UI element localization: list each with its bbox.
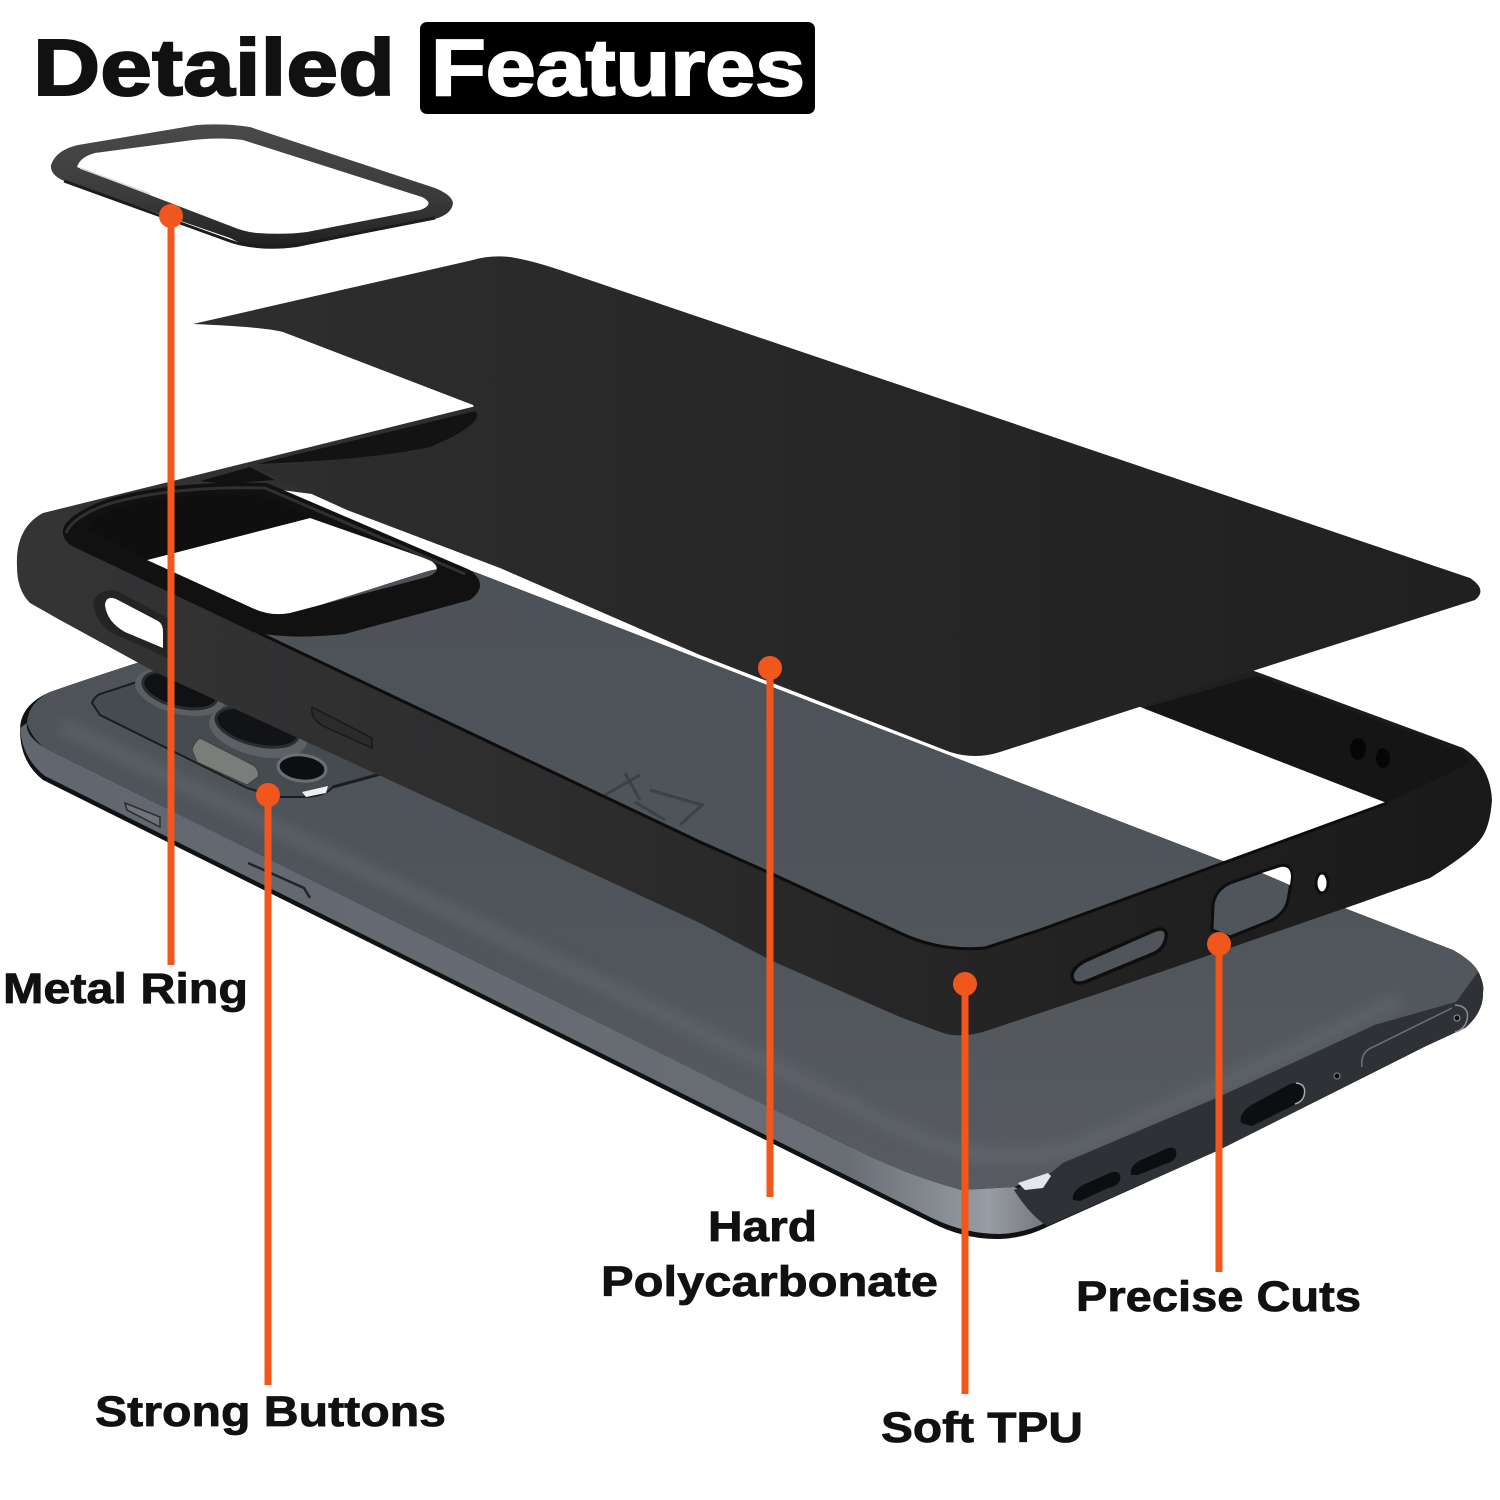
phone side band: [20, 723, 1051, 1234]
earpiece dots: [1350, 738, 1390, 768]
logo on phone: [605, 773, 702, 825]
metal ring part: [51, 124, 453, 249]
phone silhouette: [20, 568, 1483, 1239]
label: Hard Polycarbonate: Polycarbonate: [601, 1258, 938, 1306]
label: Soft TPU: Soft TPU: [881, 1404, 1083, 1452]
port cut: precise cuts: [1212, 865, 1292, 937]
side buttons: [125, 803, 160, 827]
phone back face: [27, 568, 1480, 1190]
side button cut: [93, 590, 172, 660]
title: [33, 22, 815, 114]
camera module: [92, 660, 390, 797]
phone body: [20, 568, 1483, 1239]
callout line: metal ring: [159, 204, 183, 965]
label: Precise Cuts: Precise Cuts: [1076, 1273, 1361, 1321]
mic hole: [1316, 873, 1328, 893]
camera ring on case: [63, 483, 480, 637]
title highlight: Features: Features: [431, 23, 805, 112]
label: Metal Ring: Metal Ring: [3, 965, 248, 1013]
shadow wedge under sheet notch: [257, 411, 477, 464]
label: Hard Polycarbonate: Hard: [708, 1203, 817, 1251]
far rim: [1143, 676, 1470, 803]
label: Hard Polycarbonate: [601, 1203, 938, 1306]
callout line: strong buttons: [256, 783, 280, 1385]
hard polycarbonate sheet: [193, 256, 1480, 756]
flash: [192, 738, 258, 785]
volume cut: [312, 707, 372, 748]
title: Detailed: [33, 23, 395, 112]
speaker cut: [1072, 929, 1166, 983]
callout lines: [159, 204, 1231, 1394]
soft TPU case frame: [17, 405, 1492, 1035]
phone bottom edge with ports: [1014, 972, 1483, 1226]
callout line: soft TPU: [953, 972, 977, 1394]
speaker slots: [1131, 1148, 1176, 1175]
callout line: hard polycarbonate: [758, 656, 782, 1197]
usb port: [1241, 1083, 1305, 1126]
label: Strong Buttons: Strong Buttons: [95, 1388, 446, 1436]
callout line: precise cuts: [1207, 932, 1231, 1272]
